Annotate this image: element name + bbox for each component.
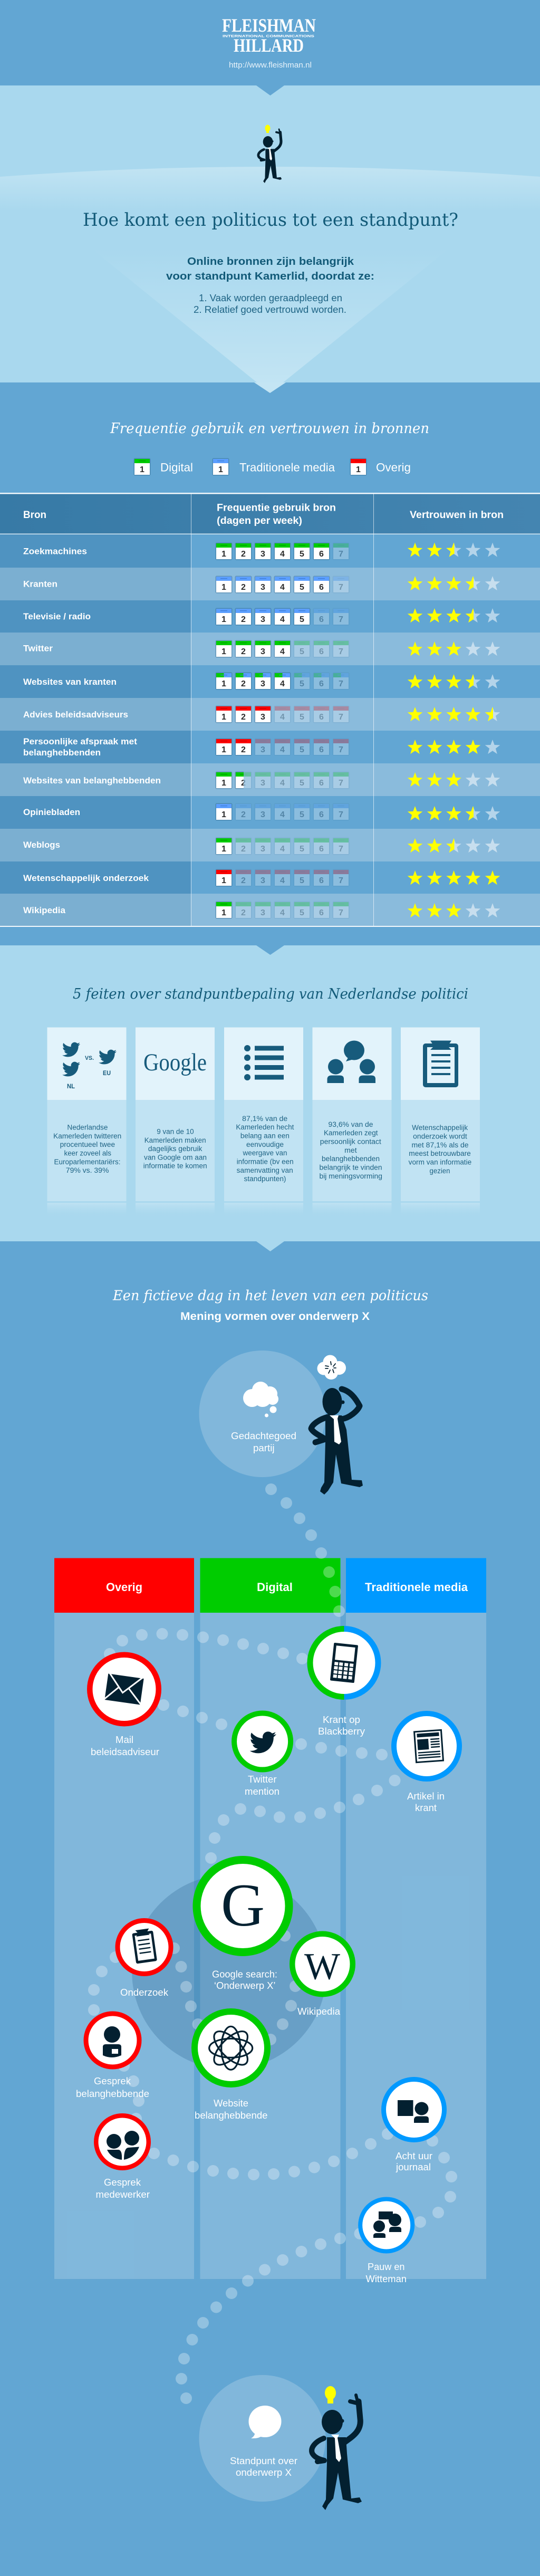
- node: Twitter mention: [232, 1710, 293, 1797]
- legend: 1: [140, 465, 144, 474]
- icon: talk show: [373, 2211, 401, 2238]
- row: Websites van belanghebbenden: 4: [280, 779, 285, 788]
- fact text: [409, 1124, 471, 1175]
- fact text: belang aan een: [240, 1132, 290, 1139]
- table header: Bron: [23, 510, 46, 521]
- row: Weblogs: 7: [339, 845, 343, 854]
- row: Wikipedia: 6: [319, 908, 324, 917]
- row: Opiniebladen: 7: [339, 810, 343, 819]
- row: Persoonlijke afspraak: 2: [241, 745, 246, 754]
- intro subheading: voor standpunt Kamerlid, doordat ze:: [166, 271, 374, 282]
- icon: light bulb: [325, 2386, 336, 2403]
- row: Kranten: 1: [221, 583, 226, 592]
- icon: clipboard: [132, 1928, 157, 1964]
- row: Weblogs: 5: [300, 845, 304, 854]
- icon: people talking: [327, 1040, 375, 1083]
- row: Websites van kranten: 4: [280, 679, 285, 688]
- end bubble: position on subject: Standpunt over: [230, 2455, 297, 2466]
- table header: (dagen per week): [217, 515, 302, 526]
- fact text: procentueel twee: [60, 1141, 115, 1148]
- subheading: forming an opinion: Mening vormen over onderwerp X: [180, 1310, 370, 1323]
- row: Wikipedia: [0, 894, 540, 926]
- end bubble: position on subject: [199, 2375, 326, 2502]
- fact text: 9 van de 10: [157, 1128, 194, 1135]
- fact text: informatie (bv een: [237, 1157, 294, 1166]
- row: Websites van belanghebbenden: 7: [339, 779, 343, 788]
- row: Opiniebladen: 1: [221, 810, 226, 819]
- fact text: met: [344, 1146, 357, 1154]
- row: Advies beleidsadviseurs: 6: [319, 713, 324, 722]
- node: Twitter mention: Twitter: [248, 1774, 276, 1785]
- fact text: informatie te komen: [143, 1162, 207, 1170]
- row: Opiniebladen: 5: [300, 810, 304, 819]
- row: Advies beleidsadviseurs: 3: [261, 713, 265, 722]
- row: Persoonlijke afspraak: 1: [221, 745, 226, 754]
- chevron: facts section: [256, 1241, 284, 1251]
- node: Artikel in krant: Artikel in: [407, 1790, 445, 1802]
- icon: envelope: [103, 1672, 145, 1705]
- node: Krant op Blackberry: Blackberry: [318, 1726, 365, 1737]
- icon: confused cloud: [317, 1355, 346, 1380]
- row: Zoekmachines: 6: [319, 550, 324, 559]
- fact text: eenvoudige: [246, 1141, 284, 1148]
- node: Pauw en Witteman: Pauw en: [368, 2261, 405, 2272]
- fact text: Nederlandse: [67, 1124, 108, 1131]
- row: Televisie / radio: 4: [280, 615, 285, 624]
- icon: atom: [209, 2026, 253, 2070]
- row: Zoekmachines: [0, 534, 540, 568]
- fact text: Kamerleden maken: [144, 1136, 206, 1144]
- fact text: keer zoveel als: [64, 1149, 111, 1157]
- row: Televisie / radio: 1: [221, 615, 226, 624]
- start bubble: party ideas: [199, 1351, 326, 1477]
- node: Artikel in krant: [391, 1711, 462, 1813]
- row: Twitter: 7: [339, 647, 343, 656]
- row: Websites van belanghebbenden: 2: [241, 779, 246, 788]
- row: Wikipedia: 1: [221, 908, 226, 917]
- row: Websites van kranten: [0, 665, 540, 698]
- row: Wikipedia: 7: [339, 908, 343, 917]
- row: Advies beleidsadviseurs: 4: [280, 713, 285, 722]
- table header: Vertrouwen in bron: [410, 510, 504, 521]
- node: Mail beleidsadviseur: [87, 1652, 161, 1757]
- legend: Overig: [376, 461, 411, 474]
- row: Persoonlijke afspraak: 4: [280, 745, 285, 754]
- row: Televisie / radio: 6: [319, 615, 324, 624]
- row: Weblogs: [0, 829, 540, 861]
- node: Google search: [193, 1856, 293, 1991]
- node: Onderzoek: [115, 1918, 173, 1998]
- node: Gesprek medewerker: medewerker: [96, 2189, 150, 2200]
- row: Opiniebladen: Opiniebladen: [23, 807, 80, 817]
- node: Gesprek medewerker: Gesprek: [104, 2177, 141, 2188]
- node: Gesprek belanghebbende: Gesprek: [94, 2075, 131, 2086]
- row: Persoonlijke afspraak: Persoonlijke afspraak met: [23, 736, 137, 746]
- row: Opiniebladen: 3: [261, 810, 265, 819]
- legend: 1: [218, 465, 223, 474]
- fact text: meest betrouwbare: [409, 1150, 471, 1157]
- fact text: 93,6% van de: [328, 1121, 373, 1128]
- icon: Google G: G: [221, 1872, 265, 1939]
- column: Traditionele media: [346, 1558, 486, 2279]
- fact text: gezien: [429, 1167, 450, 1175]
- card: google: [136, 1028, 215, 1218]
- row: Wetenschappelijk onderzoek: Wetenschappelijk onderzoek: [23, 873, 149, 883]
- card: twitter: [47, 1028, 127, 1218]
- icon: bullet list: [244, 1045, 284, 1080]
- icon: two people: [107, 2131, 139, 2160]
- legend: Traditionele media: [239, 461, 335, 474]
- fact text: Europarlementariërs:: [54, 1158, 120, 1166]
- icon: speech bubble: [249, 2406, 282, 2438]
- row: Wetenschappelijk onderzoek: 4: [280, 876, 285, 885]
- title: Hoe komt een politicus tot een standpunt?: [83, 209, 458, 231]
- row: Websites van kranten: Websites van kranten: [23, 677, 117, 687]
- section: intro: [0, 85, 540, 393]
- icon: thought cloud: [243, 1382, 278, 1417]
- row: Weblogs: 1: [221, 845, 226, 854]
- column: Overig: [54, 1558, 194, 2279]
- row: Wikipedia: 5: [300, 908, 304, 917]
- card: scientific research: [401, 1028, 480, 1218]
- column: Overig: Overig: [106, 1581, 142, 1594]
- fact text: 87,1% van de: [242, 1115, 287, 1123]
- column: Digital: Digital: [257, 1581, 293, 1594]
- fact text: standpunten): [244, 1175, 286, 1183]
- figure: politician with idea: [258, 125, 282, 183]
- chevron: intro triangle tip: [254, 382, 286, 393]
- fact text: Kamerleden hecht: [236, 1123, 294, 1131]
- row: Twitter: 5: [300, 647, 304, 656]
- row: Websites van kranten: 6: [319, 679, 324, 688]
- row: Websites van belanghebbenden: Websites van belanghebbenden: [23, 775, 161, 786]
- fact text: belanghebbenden: [322, 1155, 380, 1163]
- fact text: met 87,1% als de: [411, 1141, 468, 1149]
- node: Wikipedia: [290, 1931, 355, 2017]
- fact text: [53, 1124, 121, 1174]
- column: Digital: [200, 1558, 341, 2279]
- node: Onderzoek: Onderzoek: [120, 1987, 169, 1998]
- icon: phone: [330, 1643, 358, 1683]
- start bubble: party ideas: partij: [253, 1442, 274, 1453]
- row: Wetenschappelijk onderzoek: 7: [339, 876, 343, 885]
- intro list: 2. Relatief goed vertrouwd worden.: [194, 304, 346, 315]
- logo: Fleishman Hillard: HILLARD: [234, 35, 304, 56]
- row: Advies beleidsadviseurs: 1: [221, 713, 226, 722]
- row: Zoekmachines: 3: [261, 550, 265, 559]
- end bubble: position on subject: onderwerp X: [236, 2467, 292, 2478]
- row: Websites van kranten: 1: [221, 679, 226, 688]
- node: Mail beleidsadviseur: Mail: [115, 1734, 133, 1745]
- row: Kranten: [0, 568, 540, 600]
- row: Kranten: Kranten: [23, 579, 57, 589]
- node: Gesprek medewerker: [94, 2113, 151, 2200]
- row: Kranten: 6: [319, 583, 324, 592]
- legend: 1: [356, 465, 361, 474]
- legend: Digital: [160, 461, 193, 474]
- row: Twitter: 6: [319, 647, 324, 656]
- row: Wetenschappelijk onderzoek: 2: [241, 876, 246, 885]
- row: Advies beleidsadviseurs: 5: [300, 713, 304, 722]
- icon: birds NL vs EU: [62, 1042, 117, 1090]
- columns chart: media channels: [54, 1558, 486, 2279]
- icon: light bulb: [265, 125, 270, 133]
- fact text: vorm van informatie: [409, 1158, 471, 1166]
- row: Websites van kranten: 5: [300, 679, 304, 688]
- table: [0, 493, 540, 927]
- heading: fictional day: Een fictieve dag in het leven van een politicus: [112, 1288, 428, 1304]
- node: Acht uur journaal: journaal: [396, 2161, 431, 2172]
- heading: frequency and trust: Frequentie gebruik en vertrouwen in bronnen: [110, 420, 429, 437]
- row: Kranten: 4: [280, 583, 285, 592]
- row: Advies beleidsadviseurs: 7: [339, 713, 343, 722]
- node: Mail beleidsadviseur: beleidsadviseur: [91, 1746, 159, 1757]
- fact text: persoonlijk contact: [320, 1137, 381, 1146]
- row: Televisie / radio: 2: [241, 615, 246, 624]
- node: Artikel in krant: krant: [415, 1802, 437, 1813]
- row: Zoekmachines: 5: [300, 550, 304, 559]
- section: five facts: [0, 945, 540, 1241]
- row: Weblogs: 6: [319, 845, 324, 854]
- icon: presenter with screen: [398, 2100, 429, 2123]
- icon: Wikipedia W: W: [304, 1946, 340, 1988]
- table header: Frequentie gebruik bron: [217, 502, 336, 514]
- icon: Google wordmark: Google: [143, 1049, 207, 1076]
- row: Websites van belanghebbenden: 2: [241, 779, 246, 788]
- row: Persoonlijke afspraak: 6: [319, 745, 324, 754]
- fact text: Kamerleden zegt: [324, 1129, 378, 1137]
- row: Zoekmachines: Zoekmachines: [23, 547, 87, 556]
- node: Acht uur journaal: Acht uur: [396, 2150, 432, 2161]
- arc highlight: [0, 167, 540, 211]
- row: Persoonlijke afspraak: [0, 731, 540, 763]
- node: Pauw en Witteman: [358, 2197, 414, 2284]
- node: Wikipedia: Wikipedia: [297, 2006, 341, 2017]
- fact text: belangrijk te vinden: [320, 1164, 382, 1171]
- row: Websites van belanghebbenden: 1: [221, 779, 226, 788]
- fact text: van Google om aan: [144, 1153, 207, 1162]
- node: Acht uur journaal: [381, 2077, 447, 2172]
- row: Opiniebladen: 6: [319, 810, 324, 819]
- intro subheading: [166, 256, 374, 282]
- row: Zoekmachines: 2: [241, 550, 246, 559]
- row: Websites van belanghebbenden: 6: [319, 779, 324, 788]
- row: Twitter: 4: [280, 647, 285, 656]
- icon: clipboard: [423, 1040, 458, 1087]
- column: Traditionele media: Traditionele media: [365, 1581, 468, 1594]
- row: Wikipedia: 3: [261, 908, 265, 917]
- section: logo header: [0, 0, 540, 85]
- row: Advies beleidsadviseurs: Advies beleidsadviseurs: [23, 710, 128, 720]
- intro list: [194, 293, 346, 315]
- row: Zoekmachines: 4: [280, 550, 285, 559]
- logo: Fleishman Hillard: INTERNATIONAL COMMUNICATIONS: [223, 35, 315, 38]
- section: fictional day background: [0, 1241, 540, 2576]
- row: Websites van belanghebbenden: [0, 763, 540, 796]
- row: Advies beleidsadviseurs: [0, 698, 540, 731]
- node: Twitter mention: mention: [245, 1786, 279, 1797]
- section: table background: [0, 382, 540, 945]
- logo: Fleishman Hillard: [222, 15, 316, 56]
- node: Gesprek belanghebbende: [76, 2011, 149, 2099]
- row: Zoekmachines: 7: [339, 550, 343, 559]
- fact text: Kamerleden twitteren: [53, 1132, 121, 1140]
- row: Wetenschappelijk onderzoek: 1: [221, 876, 226, 885]
- node: Pauw en Witteman: Witteman: [366, 2273, 407, 2284]
- path: dotted route: [88, 1483, 457, 2404]
- row: Kranten: 2: [241, 583, 246, 592]
- intro list: 1. Vaak worden geraadpleegd en: [199, 293, 342, 303]
- node: Website belanghebbende: [191, 2008, 271, 2121]
- row: Wetenschappelijk onderzoek: 3: [261, 876, 265, 885]
- icon: twitter bird: [250, 1731, 276, 1753]
- row: Twitter: Twitter: [23, 644, 53, 653]
- fact text: weergave van: [243, 1149, 287, 1157]
- card: personal contact: [312, 1028, 391, 1218]
- triangle highlight: [91, 248, 449, 393]
- row: Opiniebladen: 2: [241, 810, 246, 819]
- row: Televisie / radio: 5: [300, 615, 304, 624]
- row: Websites van kranten: 2: [241, 679, 246, 688]
- node: Website belanghebbende: belanghebbende: [195, 2110, 268, 2121]
- logo: Fleishman Hillard: FLEISHMAN: [222, 15, 316, 36]
- row: Opiniebladen: 4: [280, 810, 285, 819]
- intro subheading: Online bronnen zijn belangrijk: [187, 256, 354, 267]
- chevron: table section: [256, 945, 284, 955]
- url: http://www.fleishman.nl: [229, 61, 312, 70]
- legend: [134, 458, 411, 476]
- row: Persoonlijke afspraak: 7: [339, 745, 343, 754]
- row: Televisie / radio: [0, 600, 540, 633]
- row: Weblogs: Weblogs: [23, 840, 60, 850]
- row: Televisie / radio: 7: [339, 615, 343, 624]
- node: Krant op Blackberry: [307, 1626, 381, 1737]
- row: Twitter: 2: [241, 647, 246, 656]
- row: Websites van kranten: 3: [261, 679, 265, 688]
- row: Wetenschappelijk onderzoek: 5: [300, 876, 304, 885]
- row: Televisie / radio: Televisie / radio: [23, 611, 91, 621]
- row: Kranten: 7: [339, 583, 343, 592]
- row: Wetenschappelijk onderzoek: 6: [319, 876, 324, 885]
- node: Krant op Blackberry: Krant op: [323, 1714, 360, 1725]
- row: Persoonlijke afspraak: 5: [300, 745, 304, 754]
- heading: five facts: 5 feiten over standpuntbepaling van Nederlandse politici: [73, 986, 468, 1002]
- row: Wikipedia: 4: [280, 908, 285, 917]
- row: Advies beleidsadviseurs: 2: [241, 713, 246, 722]
- icon: person with badge: [103, 2026, 121, 2057]
- row: Twitter: 3: [261, 647, 265, 656]
- row: Persoonlijke afspraak: belanghebbenden: [23, 748, 101, 758]
- row: Wetenschappelijk onderzoek: [0, 861, 540, 894]
- node: Google search: ‘Onderwerp X’: [214, 1980, 275, 1991]
- row: Twitter: [0, 633, 540, 665]
- row: Websites van kranten: 7: [339, 679, 343, 688]
- start bubble: party ideas: Gedachtegoed: [231, 1430, 296, 1441]
- row: Kranten: 3: [261, 583, 265, 592]
- row: Persoonlijke afspraak: 3: [261, 745, 265, 754]
- fact text: [143, 1128, 207, 1170]
- fact text: dagelijks gebruik: [148, 1145, 202, 1153]
- chevron: header: [256, 85, 284, 95]
- row: Kranten: 5: [300, 583, 304, 592]
- icon: birds NL vs EU: NL: [67, 1083, 75, 1090]
- fact text: [236, 1115, 294, 1183]
- node: Website belanghebbende: Website: [214, 2098, 248, 2109]
- row: Televisie / radio: 3: [261, 615, 265, 624]
- fact text: 79% vs. 39%: [66, 1166, 109, 1174]
- card: summary list: [224, 1028, 303, 1218]
- row: Twitter: 1: [221, 647, 226, 656]
- row: Websites van belanghebbenden: 5: [300, 779, 304, 788]
- figure: thinking politician: [311, 1355, 363, 1495]
- table header: [0, 494, 540, 534]
- icon: birds NL vs EU: EU: [103, 1069, 111, 1077]
- icon: newspaper: [414, 1730, 443, 1763]
- row: Opiniebladen: [0, 796, 540, 829]
- fact text: Wetenschappelijk: [412, 1124, 468, 1132]
- node: Google search: Google search:: [212, 1969, 277, 1979]
- backdrop: search cluster: [132, 1875, 326, 2069]
- figure: politician with conclusion: [312, 2386, 362, 2510]
- row: Weblogs: 2: [241, 845, 246, 854]
- fact text: onderzoek wordt: [413, 1132, 467, 1141]
- row: Weblogs: 3: [261, 845, 265, 854]
- row: Wikipedia: 2: [241, 908, 246, 917]
- fact text: bij meningsvorming: [320, 1172, 382, 1180]
- row: Zoekmachines: 1: [221, 550, 226, 559]
- fact text: samenvatting van: [237, 1166, 293, 1174]
- row: Weblogs: 4: [280, 845, 285, 854]
- fact text: [320, 1121, 382, 1180]
- node: Gesprek belanghebbende: belanghebbende: [76, 2088, 149, 2099]
- row: Websites van belanghebbenden: 3: [261, 779, 265, 788]
- row: Wikipedia: Wikipedia: [23, 905, 66, 915]
- icon: birds NL vs EU: VS.: [85, 1055, 94, 1061]
